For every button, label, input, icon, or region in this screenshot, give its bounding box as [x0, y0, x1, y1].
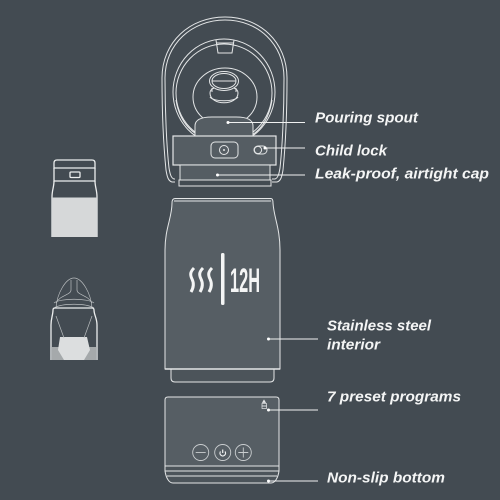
- leader: [218, 174, 305, 176]
- non-slip ridges: [165, 466, 279, 483]
- callout: non-slip bottom: [267, 470, 445, 486]
- anchor: [267, 408, 270, 412]
- button ring: [220, 146, 228, 154]
- button dot: [223, 149, 225, 151]
- anchor: [216, 174, 219, 176]
- child lock button: [211, 142, 238, 158]
- airtight cap: [180, 165, 270, 180]
- top lip: [174, 200, 271, 202]
- teat: [56, 278, 92, 308]
- latch: [70, 172, 80, 178]
- lid ring: [173, 39, 275, 145]
- inner funnel: [56, 316, 92, 338]
- anchor: [226, 121, 230, 124]
- lock switch: [254, 146, 267, 154]
- leader: [268, 480, 318, 482]
- collar: [173, 136, 276, 165]
- anchor: [267, 338, 270, 340]
- small icon: bottle fill level, capped: [52, 160, 97, 237]
- body shell: [165, 198, 280, 369]
- bottom edge: [165, 368, 280, 370]
- callout: 7 preset programs: [267, 390, 461, 412]
- liquid fill centre: [58, 337, 90, 360]
- base shell: [165, 397, 279, 466]
- pouring spout: [195, 117, 253, 136]
- small icon: bottle with teat inside: [51, 278, 97, 360]
- liquid fill lower band: [52, 347, 96, 360]
- lid: [54, 160, 95, 168]
- main body: 12H stainless steel: 12H: [230, 262, 260, 300]
- cap rim: [179, 180, 271, 186]
- base foot: [171, 369, 274, 382]
- warmer base: [165, 397, 279, 483]
- minus button: [193, 444, 209, 460]
- shoulders: [52, 181, 97, 237]
- callout: pouring spout: [226, 110, 419, 126]
- main body: 12H stainless steel: [165, 198, 280, 382]
- heat waves icon: [191, 268, 212, 292]
- label: 7 preset programs: [327, 390, 461, 406]
- label: Pouring spout: [315, 110, 419, 126]
- anchor: [264, 146, 266, 150]
- callout: child lock: [264, 144, 388, 160]
- callout: leak-proof cap: [216, 166, 489, 182]
- leader: [268, 409, 318, 411]
- liquid fill: [52, 198, 97, 237]
- lock knob: [254, 146, 262, 154]
- anchor: [267, 480, 270, 482]
- leader: [228, 122, 305, 124]
- leader: [268, 338, 318, 340]
- leader: [265, 147, 305, 149]
- cap with handle and spout: [162, 17, 287, 186]
- bottle shell: [51, 308, 97, 360]
- label: Non-slip bottom: [327, 470, 445, 486]
- label: Leak-proof, airtight cap: [315, 166, 489, 182]
- callout: stainless steel interior: [267, 318, 432, 354]
- nozzle: [210, 72, 238, 103]
- label line 2: interior: [327, 338, 381, 354]
- label: Child lock: [315, 144, 388, 160]
- divider: [221, 253, 224, 305]
- plus button: [235, 444, 251, 460]
- collar: [54, 168, 95, 181]
- preset indicator icon: [262, 400, 266, 408]
- handle loop: [162, 17, 287, 182]
- label line 1: Stainless steel: [327, 318, 432, 334]
- power button: [215, 444, 231, 460]
